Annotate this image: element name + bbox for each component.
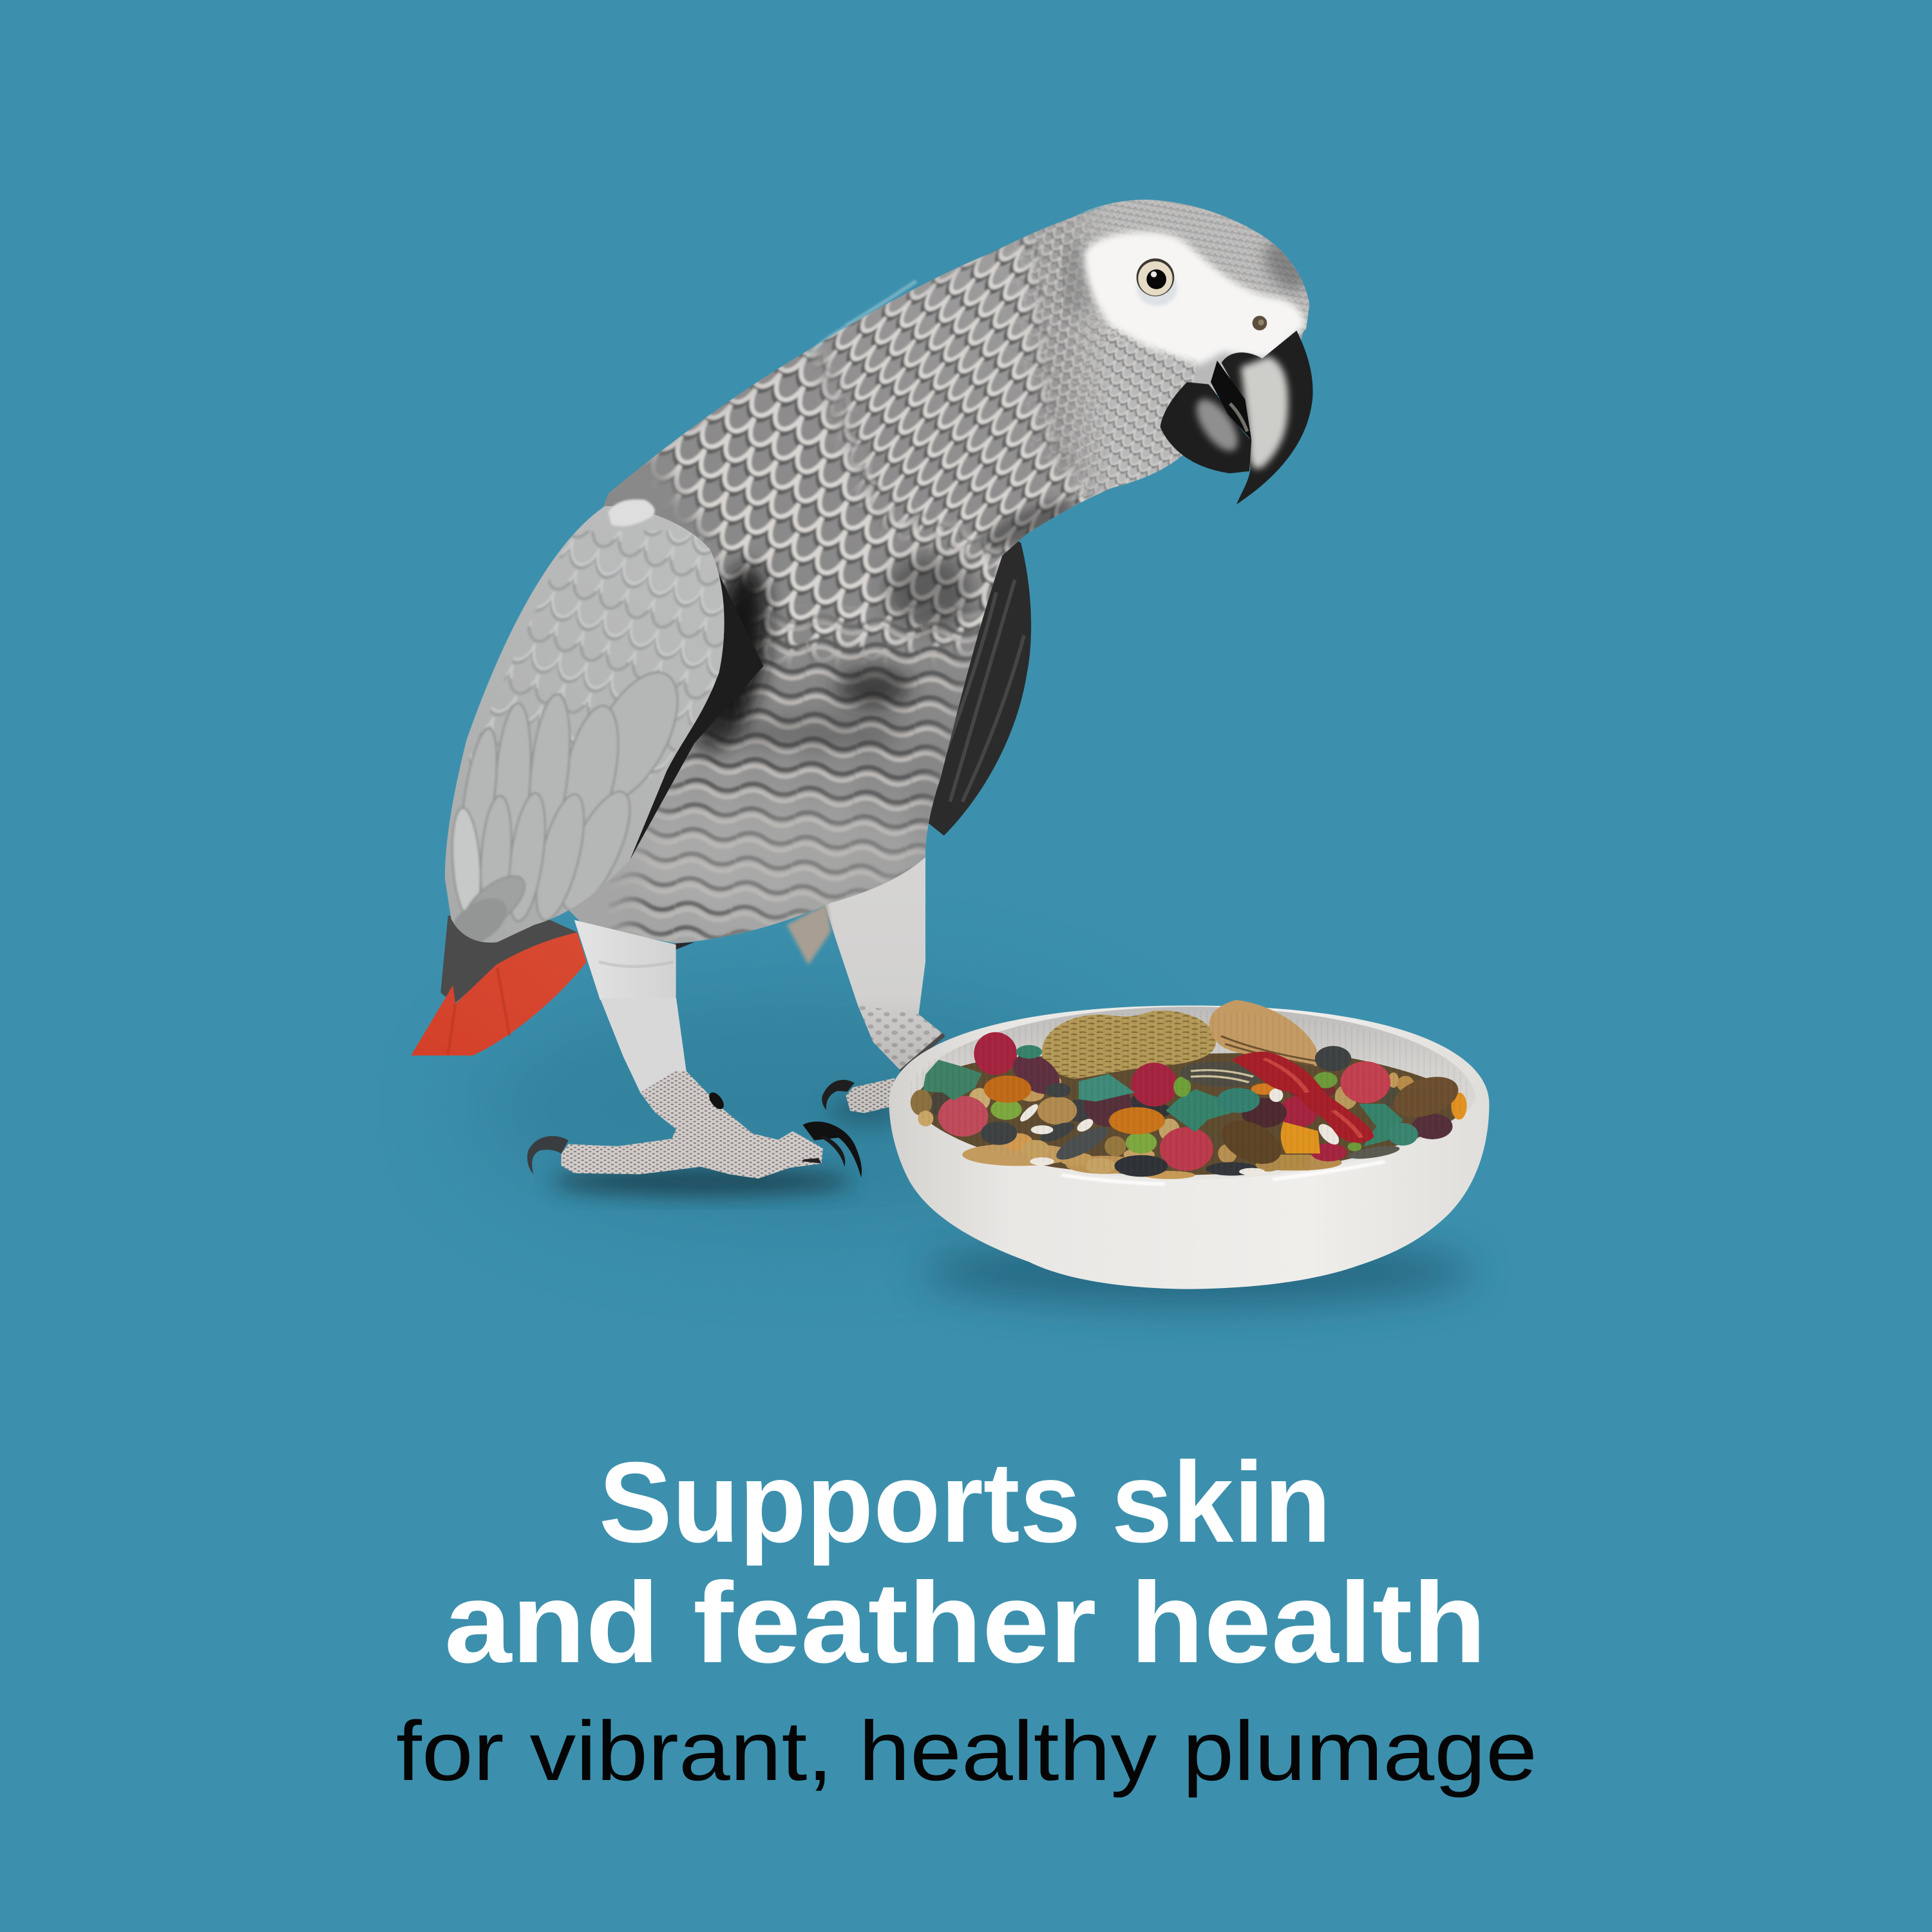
purple pellets [1005,1051,1453,1139]
parrot [411,185,1320,1183]
soft floor shadows [470,985,1475,1307]
beak [1160,330,1313,504]
tail: dark base and red feathers [411,916,694,1056]
head [1056,193,1320,507]
rim highlight [1061,1161,1385,1184]
bowl with seed mix [889,1000,1489,1289]
headline line 1: Supports skin [599,1438,1331,1566]
bowl inner wall [908,1007,1475,1180]
dark striped seeds [981,1046,1403,1177]
far leg [787,845,944,1074]
near foot with claws [527,998,862,1183]
far foot and claw [822,1078,895,1113]
brown seeds [1209,1071,1472,1169]
nostril [1253,316,1267,330]
small filler nuts [929,1072,1403,1179]
near wing [444,499,763,954]
peanut [1042,1010,1216,1079]
bowl outer [889,1005,1489,1289]
infographic canvas [397,200,1533,1798]
tan nuts [911,1075,1414,1174]
white seed husks [1017,1088,1343,1175]
red pellets [938,1032,1390,1171]
corn [984,1075,1467,1153]
light green pellets [990,1072,1338,1153]
pellet texture [908,1011,1469,1174]
seed mix [908,1000,1472,1179]
far wing [922,531,1031,835]
eye [1137,258,1177,306]
red chili [1232,1052,1374,1143]
near leg [574,920,676,1000]
pale wisps on nape [800,281,916,365]
subheading: for vibrant, healthy plumage [396,1703,1537,1798]
headline line 2: and feather health [444,1558,1486,1687]
green star pellets [923,1045,1418,1147]
body, neck and chest plumage [559,185,1309,962]
almond [1209,1000,1317,1066]
food base [913,1052,1466,1175]
